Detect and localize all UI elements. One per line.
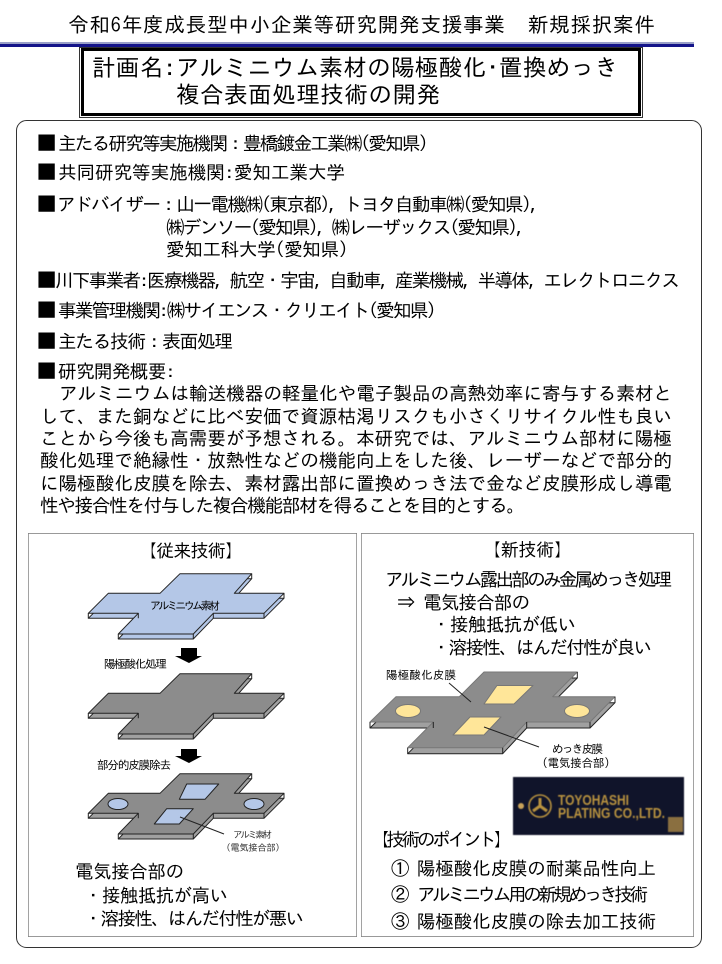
summary list	[36, 132, 680, 382]
technical points: 陽極酸化皮膜の耐薬品性向上	[417, 859, 656, 878]
new technology heading: 【新技術】	[483, 540, 572, 559]
callout: aluminium material: (電気接合部)	[226, 843, 280, 853]
technical points: ②	[391, 885, 409, 904]
arrow: film removal	[175, 749, 202, 763]
technical points: 陽極酸化皮膜の除去加工技術	[417, 912, 656, 931]
technical points: ③	[391, 912, 409, 931]
research overview paragraph: アルミニウムは輸送機器の軽量化や電子製品の高熱効率に寄与する素材と	[59, 384, 672, 403]
panel: new technology	[362, 534, 694, 936]
summary list: ■	[36, 299, 58, 321]
summary list: 共同研究等実施機関:愛知工業大学	[58, 163, 345, 182]
research overview paragraph: ことから今後も高需要が予想される。本研究では、アルミニウム部材に陽極	[40, 429, 672, 448]
plate label: アルミニウム素材	[150, 600, 220, 612]
technical points	[371, 830, 656, 931]
technical points: 【技術のポイント】	[371, 830, 512, 849]
new technology benefits: ⇒ 電気接合部の	[397, 593, 530, 612]
summary list: 愛知工科大学(愛知県)	[166, 240, 348, 259]
summary list: ■	[36, 330, 58, 352]
header rule	[0, 42, 694, 47]
summary list: 主たる研究等実施機関：豊橋鍍金工業㈱(愛知県)	[58, 134, 428, 153]
plate: plated part	[370, 672, 615, 754]
summary list: ■	[36, 360, 58, 382]
conventional heading: 【従来技術】	[139, 541, 243, 560]
research overview paragraph: 酸化処理で絶縁性・放熱性などの機能向上をした後、レーザーなどで部分的	[40, 451, 672, 470]
project name text: 複合表面処理技術の開発	[176, 82, 440, 106]
step label: film removal: 部分的皮膜除去	[97, 759, 171, 771]
summary list: ■	[36, 132, 58, 154]
technical points: アルミニウム用の新規めっき技術	[417, 885, 648, 904]
title: 令和6年度成長型中小企業等研究開発支援事業 新規採択案件	[68, 14, 655, 35]
new technology benefits: アルミニウム露出部のみ金属めっき処理	[385, 570, 672, 589]
photo: Toyohashi Plating plate: TOYOHASHI	[558, 792, 629, 809]
photo: Toyohashi Plating plate: PLATING CO.,LTD.	[558, 805, 665, 822]
callout: plated film: (電気接合部)	[542, 757, 610, 769]
research overview paragraph	[40, 384, 672, 515]
new technology benefits: ・接触抵抗が低い	[432, 615, 576, 634]
project name text	[92, 55, 618, 106]
summary list: アドバイザー：山一電機㈱(東京都), トヨタ自動車㈱(愛知県),	[57, 195, 539, 214]
conventional drawbacks	[75, 862, 304, 928]
new technology benefits: ・溶接性、はんだ付性が良い	[432, 638, 652, 657]
plate: partially removed film	[88, 774, 284, 839]
summary list: 研究開発概要:	[58, 362, 175, 381]
callout: aluminium material: アルミ素材	[233, 830, 272, 840]
step label: anodizing: 陽極酸化処理	[104, 658, 167, 670]
research overview paragraph: に陽極酸化皮膜を除去、素材露出部に置換めっき法で金など皮膜形成し導電	[40, 474, 672, 493]
plate: anodized	[88, 674, 284, 739]
conventional drawbacks: ・接触抵抗が高い	[84, 886, 228, 905]
callout: plated film	[542, 743, 610, 769]
label: anodized film: 陽極酸化皮膜	[386, 669, 456, 681]
summary list: ■	[36, 193, 58, 215]
new technology benefits	[385, 570, 672, 657]
summary list: ㈱デンソー(愛知県), ㈱レーザックス(愛知県),	[166, 218, 525, 237]
conventional drawbacks: ・溶接性、はんだ付性が悪い	[84, 909, 304, 928]
technical points: ①	[391, 859, 409, 878]
callout: aluminium material	[226, 830, 280, 853]
plate: aluminium material	[88, 574, 284, 639]
summary list: 川下事業者:医療機器, 航空・宇宙, 自動車, 産業機械, 半導体, エレクトロニクス	[55, 271, 680, 290]
project name box	[80, 48, 642, 118]
summary list: 事業管理機関:㈱サイエンス・クリエイト(愛知県)	[58, 301, 436, 320]
research overview paragraph: 性や接合性を付与した複合機能部材を得ることを目的とする。	[40, 496, 525, 515]
photo: Toyohashi Plating plate	[513, 777, 684, 835]
panel: conventional technology	[28, 534, 356, 936]
conventional drawbacks: 電気接合部の	[75, 862, 184, 881]
research overview paragraph: して、また銅などに比べ安価で資源枯渇リスクも小さくリサイクル性も良い	[40, 407, 672, 426]
summary list: 主たる技術：表面処理	[58, 332, 233, 351]
callout: plated film: めっき皮膜	[552, 743, 603, 755]
summary list: ■	[36, 269, 58, 291]
project name text: 計画名:アルミニウム素材の陽極酸化･置換めっき	[92, 55, 618, 79]
arrow: anodizing	[175, 648, 202, 663]
summary list: ■	[36, 161, 58, 183]
